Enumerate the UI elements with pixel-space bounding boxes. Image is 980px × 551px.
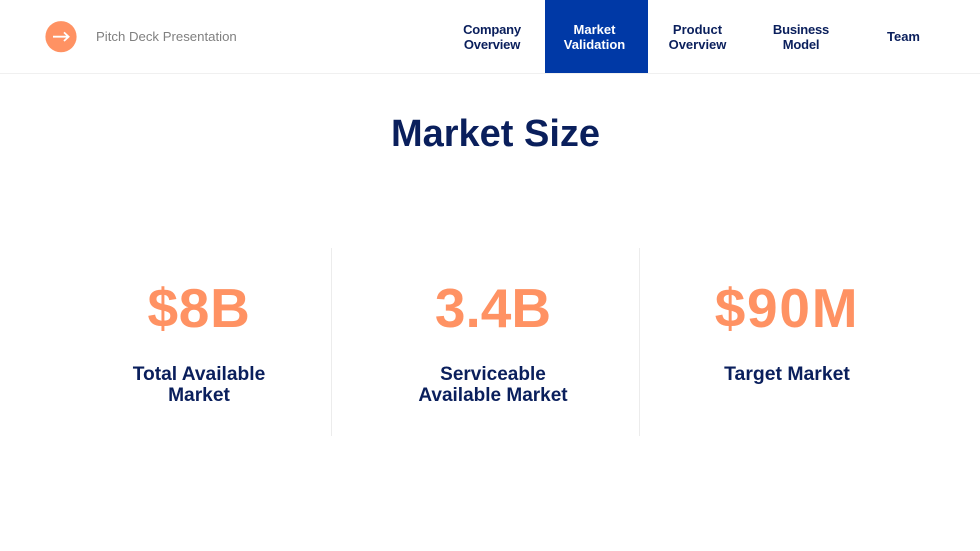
stat: total available market xyxy=(132,277,265,406)
value: $8B xyxy=(148,277,250,339)
nav: company overview xyxy=(463,22,521,52)
nav: business model: Business xyxy=(773,22,829,36)
value: $90M xyxy=(715,277,859,339)
nav: product overview: Overview xyxy=(669,36,726,52)
nav: team: Team xyxy=(887,29,920,44)
deck title: Pitch Deck Presentation xyxy=(96,29,237,44)
nav: market validation active: Validation xyxy=(564,36,625,52)
stat: serviceable available market xyxy=(418,277,568,406)
nav: company overview: Overview xyxy=(464,36,520,52)
label xyxy=(418,364,568,406)
icon: arrow circle xyxy=(45,21,77,52)
divider left xyxy=(331,248,332,436)
label: Total Available xyxy=(133,364,265,385)
value: 3.4B xyxy=(435,277,551,339)
label xyxy=(132,364,265,406)
nav: product overview: Product xyxy=(673,22,722,36)
divider right xyxy=(639,248,640,436)
nav: business model xyxy=(773,22,829,52)
nav: market validation active: Market xyxy=(574,22,615,36)
nav: market validation active xyxy=(545,0,648,73)
stat: target market xyxy=(715,277,859,385)
header bar xyxy=(0,0,980,74)
label: Market xyxy=(168,384,230,406)
nav: product overview xyxy=(669,22,726,52)
nav: business model: Model xyxy=(783,36,819,52)
title: Market Size xyxy=(391,113,600,155)
label: Serviceable xyxy=(440,364,546,385)
nav: company overview: Company xyxy=(463,22,521,36)
label: Available Market xyxy=(418,384,568,406)
label: Target Market xyxy=(724,363,850,385)
